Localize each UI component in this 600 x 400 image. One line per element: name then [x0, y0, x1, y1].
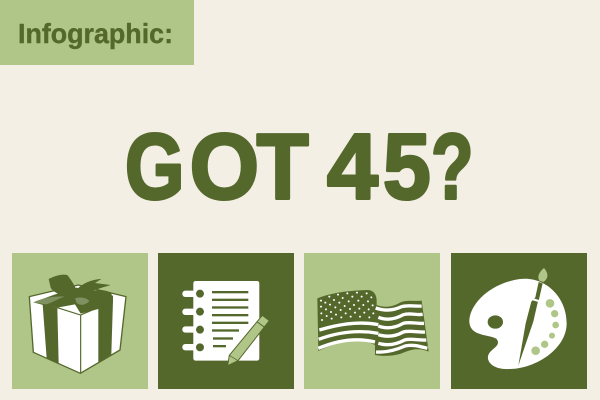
header tab: Infographic [0, 0, 194, 65]
spiral rings [182, 291, 199, 350]
icon: gift box [29, 275, 126, 373]
header tab: Infographic: Infographic: [18, 18, 173, 49]
icon: painter palette and brush [469, 268, 567, 369]
icon: notepad and pencil [182, 281, 269, 366]
title: GOT 45?: O [190, 114, 259, 218]
title: GOT 45?: ? [431, 114, 474, 218]
pencil [228, 315, 269, 366]
paint dots [531, 299, 559, 355]
panel: notebook [158, 253, 294, 389]
title: GOT 45?: T [257, 114, 309, 218]
title: GOT 45?: G [125, 114, 184, 218]
flag stripes [318, 306, 427, 352]
title: GOT 45?: 5 [383, 114, 431, 218]
brush [518, 282, 543, 366]
title: GOT 45?: 4 [327, 114, 378, 218]
ribbon [43, 304, 59, 364]
panel: gift [12, 253, 148, 389]
panel: palette [451, 253, 587, 389]
flag stars [320, 292, 374, 321]
panel: flag [304, 253, 440, 389]
title: GOT 45? [125, 114, 474, 218]
icon: waving American flag [317, 290, 429, 356]
bow [49, 275, 81, 300]
